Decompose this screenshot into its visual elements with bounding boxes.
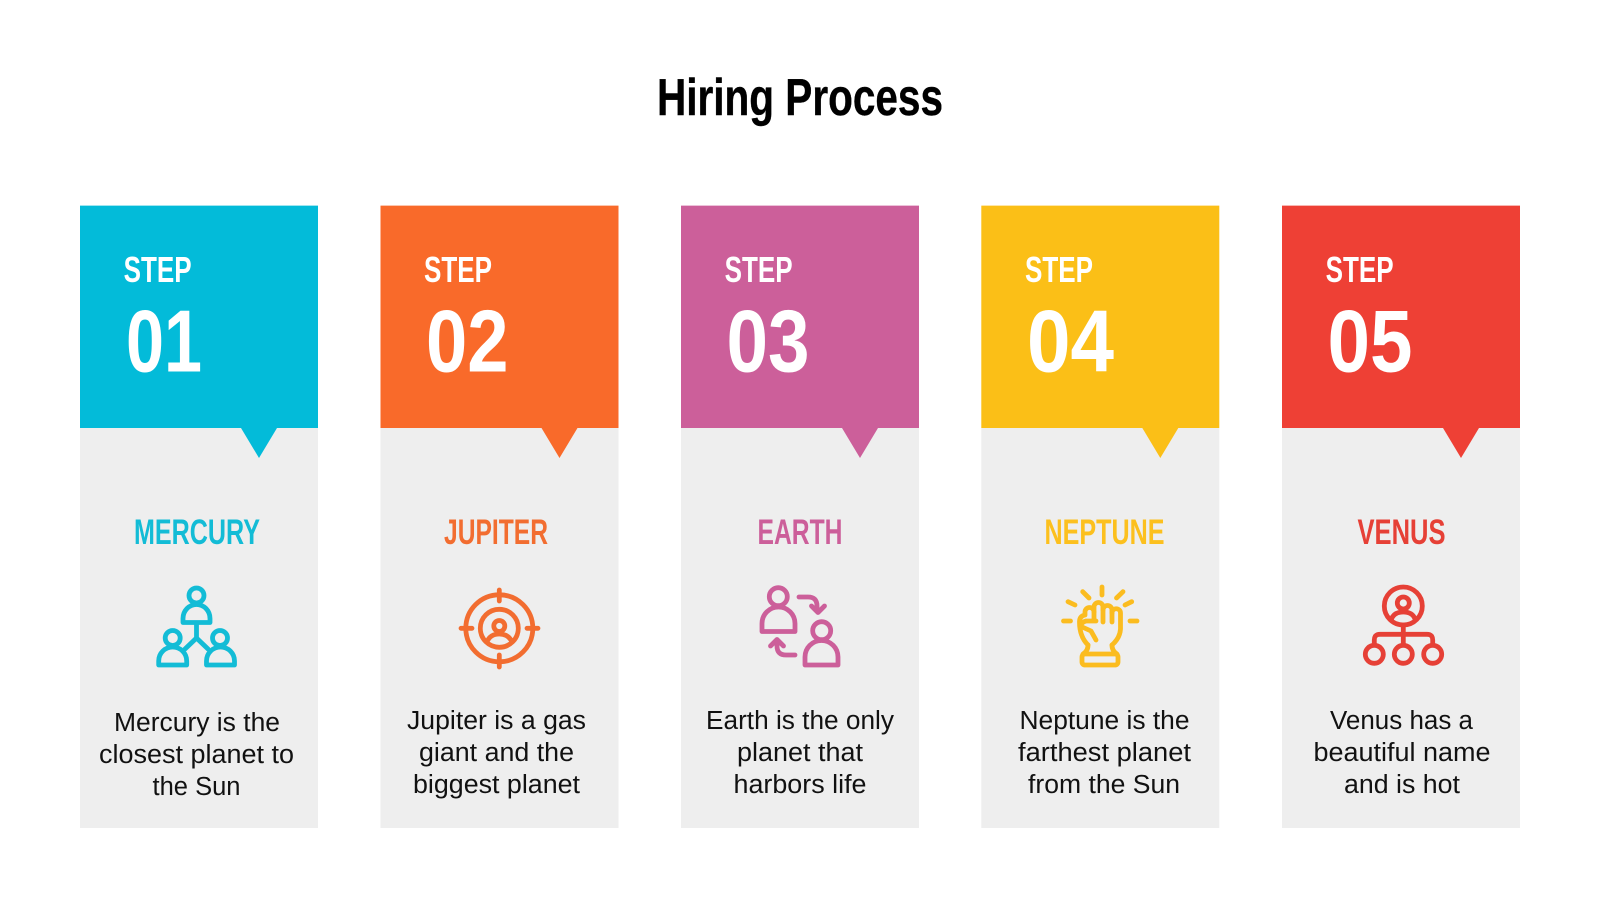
- planet name: JUPITER: [444, 513, 548, 552]
- description: Venus has a: [1330, 707, 1474, 735]
- step number: 01: [126, 292, 202, 390]
- step label: STEP: [1326, 249, 1394, 290]
- icon: raised fist: [1064, 587, 1137, 665]
- step header with pointer: [681, 206, 919, 458]
- description: farthest planet: [1018, 739, 1191, 767]
- card background: [981, 428, 1219, 828]
- step label: STEP: [124, 249, 192, 290]
- step header with pointer: [981, 206, 1219, 458]
- step header with pointer: [80, 206, 318, 458]
- icon: people exchange: [762, 588, 838, 665]
- step header with pointer: [380, 206, 618, 458]
- description: giant and the: [419, 739, 574, 767]
- title: Hiring Process: [657, 69, 943, 127]
- panel: step 03 Earth: [681, 206, 919, 828]
- description: harbors life: [734, 771, 866, 799]
- description: the Sun: [152, 773, 240, 801]
- description: Jupiter is a gas: [407, 707, 586, 735]
- step label: STEP: [725, 249, 793, 290]
- panel: step 01 Mercury: [80, 206, 318, 828]
- step label: STEP: [1025, 249, 1093, 290]
- description: Earth is the only: [706, 707, 894, 735]
- card background: [1282, 428, 1520, 828]
- step number: 03: [726, 292, 810, 390]
- description: [706, 707, 894, 799]
- step header with pointer: [1282, 206, 1520, 458]
- step number: 04: [1027, 292, 1114, 390]
- description: Mercury is the: [114, 709, 280, 737]
- panel: step 05 Venus: [1282, 206, 1520, 828]
- card background: [681, 428, 919, 828]
- description: planet that: [737, 739, 863, 767]
- step label: STEP: [424, 249, 492, 290]
- planet name: EARTH: [758, 513, 842, 552]
- description: [407, 707, 586, 799]
- icon: team hierarchy: [159, 588, 234, 665]
- description: [99, 709, 294, 801]
- planet name: VENUS: [1358, 513, 1446, 552]
- panel: step 04 Neptune: [981, 206, 1219, 828]
- description: closest planet to: [99, 741, 294, 769]
- card background: [80, 428, 318, 828]
- description: Neptune is the: [1020, 707, 1190, 735]
- description: biggest planet: [413, 771, 580, 799]
- panel: step 02 Jupiter: [380, 206, 618, 828]
- description: [1018, 707, 1191, 799]
- planet name: NEPTUNE: [1044, 513, 1164, 552]
- planet name: MERCURY: [134, 513, 260, 552]
- description: [1314, 707, 1490, 799]
- card background: [380, 428, 618, 828]
- icon: organization chart: [1365, 587, 1442, 663]
- icon: target candidate: [461, 590, 538, 667]
- step number: 05: [1328, 292, 1412, 390]
- description: from the Sun: [1028, 771, 1180, 799]
- description: beautiful name: [1314, 739, 1490, 767]
- step number: 02: [426, 292, 508, 390]
- description: and is hot: [1344, 771, 1460, 799]
